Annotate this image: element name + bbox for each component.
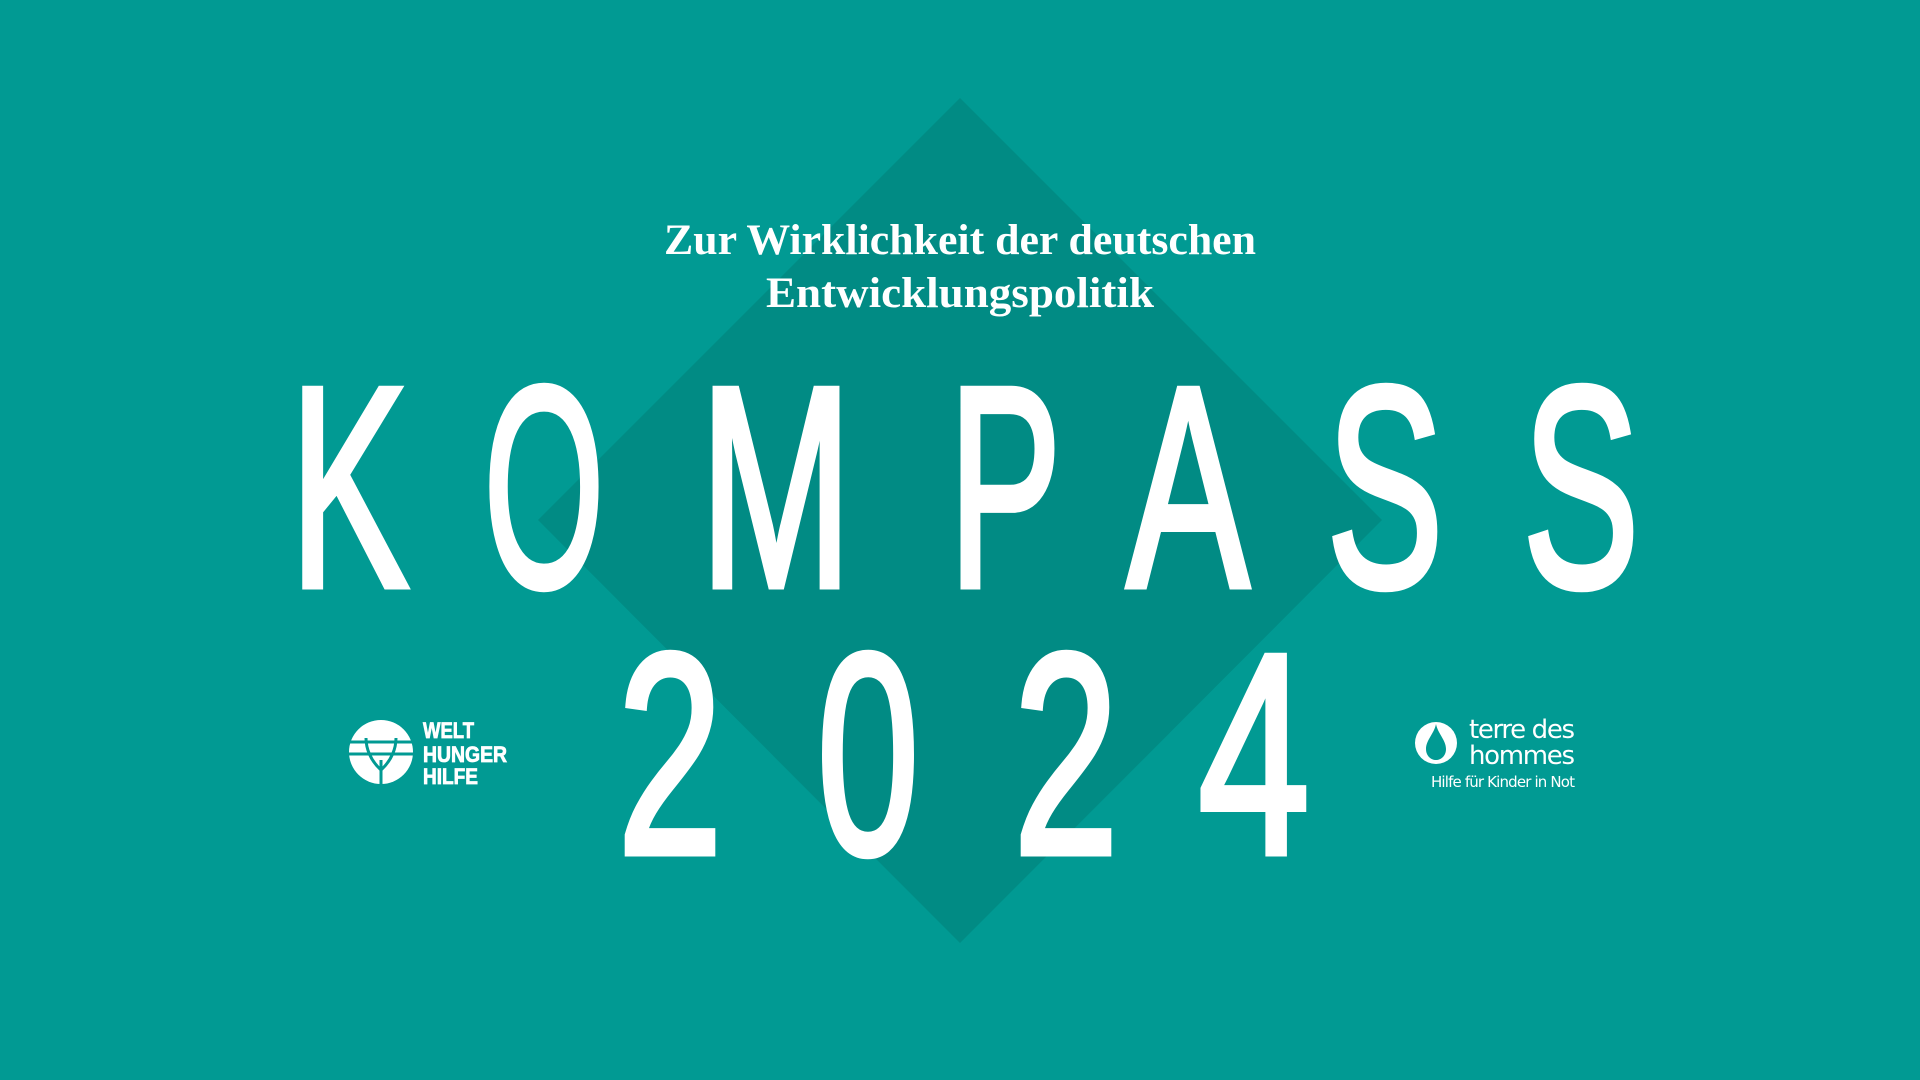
title: KOMPASS: A xyxy=(1127,328,1249,647)
logo: terre des hommes xyxy=(1415,715,1575,791)
title: 2024: 4 xyxy=(1198,596,1310,914)
title: KOMPASS: O xyxy=(484,327,604,647)
title: 2024: 2 xyxy=(1014,596,1118,914)
title: KOMPASS xyxy=(290,327,1639,648)
title: KOMPASS: S xyxy=(1523,329,1639,648)
logo: Welthungerhilfe: HUNGER xyxy=(423,742,507,767)
title: KOMPASS: P xyxy=(949,327,1061,647)
title: 2024 xyxy=(618,595,1310,914)
logo: Welthungerhilfe: WELT xyxy=(423,718,474,743)
subtitle xyxy=(664,217,1256,317)
logo: terre des hommes: hommes xyxy=(1469,741,1575,771)
logo: terre des hommes: terre des xyxy=(1469,715,1575,745)
logo: terre des hommes: Hilfe für Kinder in Not xyxy=(1431,773,1575,791)
logo: Welthungerhilfe: HILFE xyxy=(423,764,478,789)
title: KOMPASS: K xyxy=(290,329,408,647)
title: 2024: 0 xyxy=(817,595,919,914)
subtitle: Zur Wirklichkeit der deutschen xyxy=(664,217,1256,264)
logo: Welthungerhilfe xyxy=(349,718,507,789)
background diamond xyxy=(538,98,1382,943)
title: KOMPASS: S xyxy=(1327,329,1443,648)
title: KOMPASS: M xyxy=(700,328,852,647)
subtitle: Entwicklungspolitik xyxy=(766,270,1154,317)
title: 2024: 2 xyxy=(618,596,722,914)
